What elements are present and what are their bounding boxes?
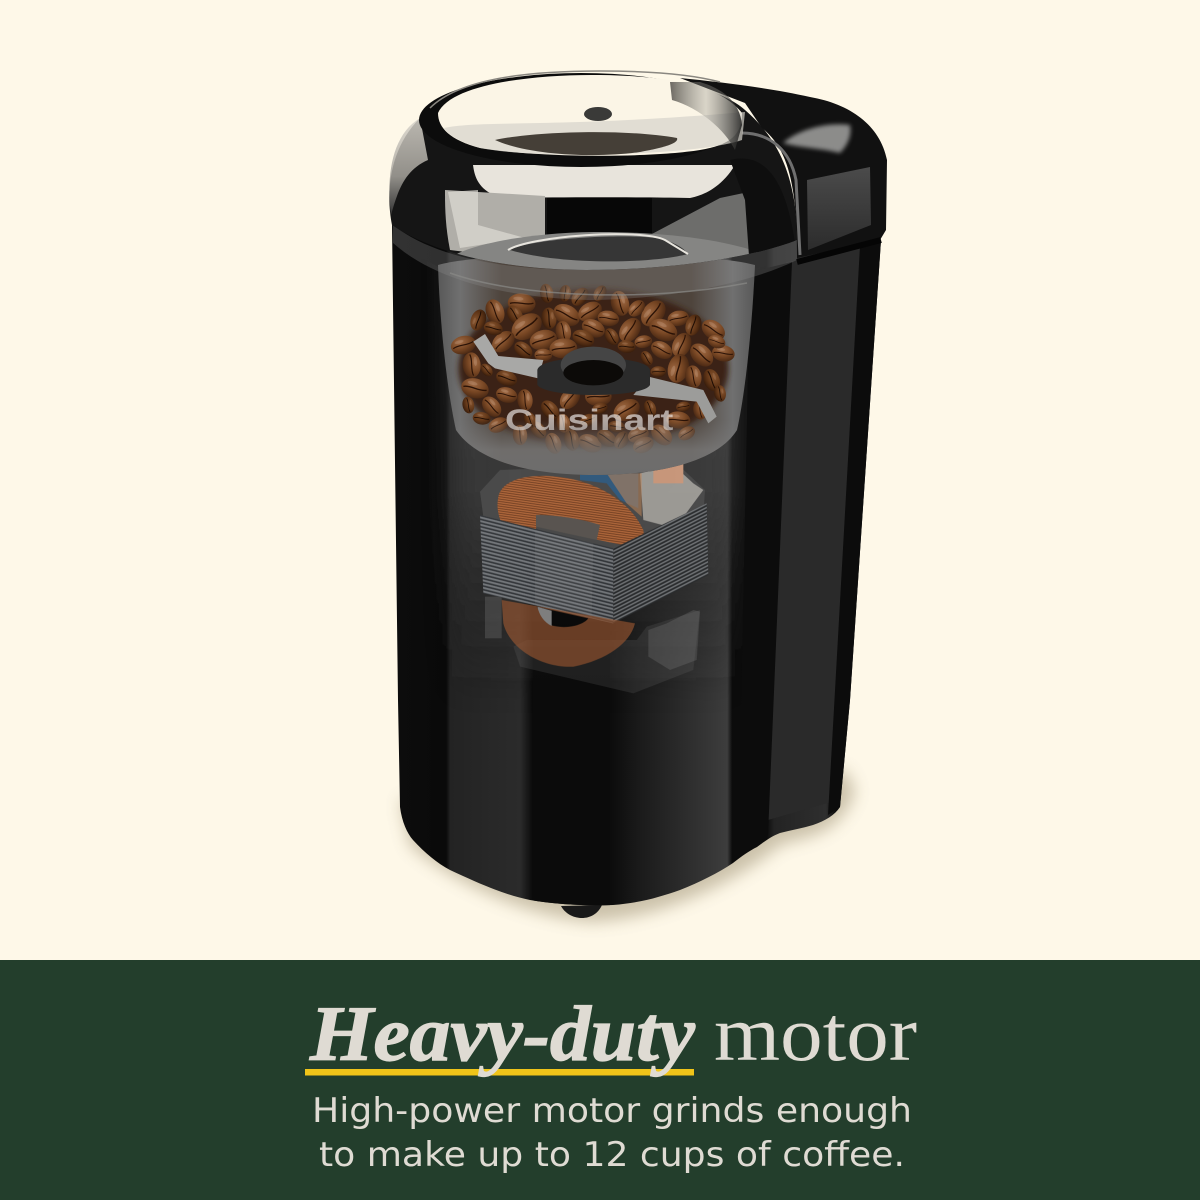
cutaway window glow [440,312,747,622]
lid left clear wall [389,118,428,215]
heading [309,990,917,1077]
peach terminal [653,463,683,483]
bean chamber [438,254,755,475]
translucent bracket [513,610,700,693]
ground shadow [400,770,855,922]
lid right shoulder [732,165,794,254]
coffee beans and blade [449,283,736,456]
coil core [536,515,600,540]
back housing [680,78,887,258]
chassis upper plate [480,463,705,550]
lid lower translucent band [393,225,797,300]
handle clear channel [742,133,800,255]
seam [797,240,881,262]
window dark patch [495,132,677,155]
right side column highlight [768,245,866,820]
left pale panel [445,190,545,252]
grinder base body [392,225,881,905]
blue patch [580,473,638,508]
caption band [0,960,1200,1200]
product: coffee grinder [389,71,887,922]
inner chamber lid glint [508,234,688,254]
rim dark ring [419,73,743,167]
blade left arm [473,334,543,378]
upper pale band [473,165,735,198]
stack right face [613,503,708,623]
orange wire [607,473,642,517]
lid knob [584,107,612,121]
clear lid [389,71,887,300]
chamber lower rim [438,265,755,475]
description [312,1091,912,1175]
upper copper coil [497,476,644,547]
blade hub base [537,357,650,395]
lid base [389,77,797,270]
right edge dark strip [828,240,881,815]
coffee beans [449,283,736,456]
heading emphasis: Heavy-duty [309,990,695,1077]
terminal right [648,610,700,670]
inner chamber lid shadow [510,236,688,261]
description line 2: to make up to 12 cups of coffee. [319,1135,905,1175]
center dark band [547,198,652,234]
blade hub dome [561,347,626,383]
lower copper coil [502,600,635,667]
rim inner clear window [438,75,742,156]
blade logo text: Cuisinart [505,404,674,437]
rubber foot [561,905,602,918]
band background [0,960,1200,1200]
stack left face [480,515,613,623]
blade right arm [633,377,717,423]
motor [480,463,708,693]
housing top highlight [783,124,851,153]
terminal left [485,597,502,638]
chamber cup [438,254,755,475]
right pale panel [652,193,748,249]
lid lower edge line [450,273,747,295]
chassis right plate [640,465,703,528]
rim bright top edge [430,71,720,108]
lid glass highlights [445,165,794,270]
bean mound base [458,288,728,448]
description line 1: High-power motor grinds enough [312,1091,912,1131]
heading remainder: motor [714,990,917,1077]
left white streak [448,190,525,248]
lower coil hole [537,607,588,627]
central stack shade [535,530,593,617]
blade hub opening [563,360,623,385]
lower dark central band [534,900,610,906]
page background [0,0,1200,960]
right side column dark groove [738,262,792,858]
window grey tone [444,112,745,155]
lower glass sweep [457,232,758,270]
housing front highlight [807,167,871,250]
spout [670,82,742,150]
lower coil hole edge [537,607,552,626]
heading underline [305,1069,694,1076]
